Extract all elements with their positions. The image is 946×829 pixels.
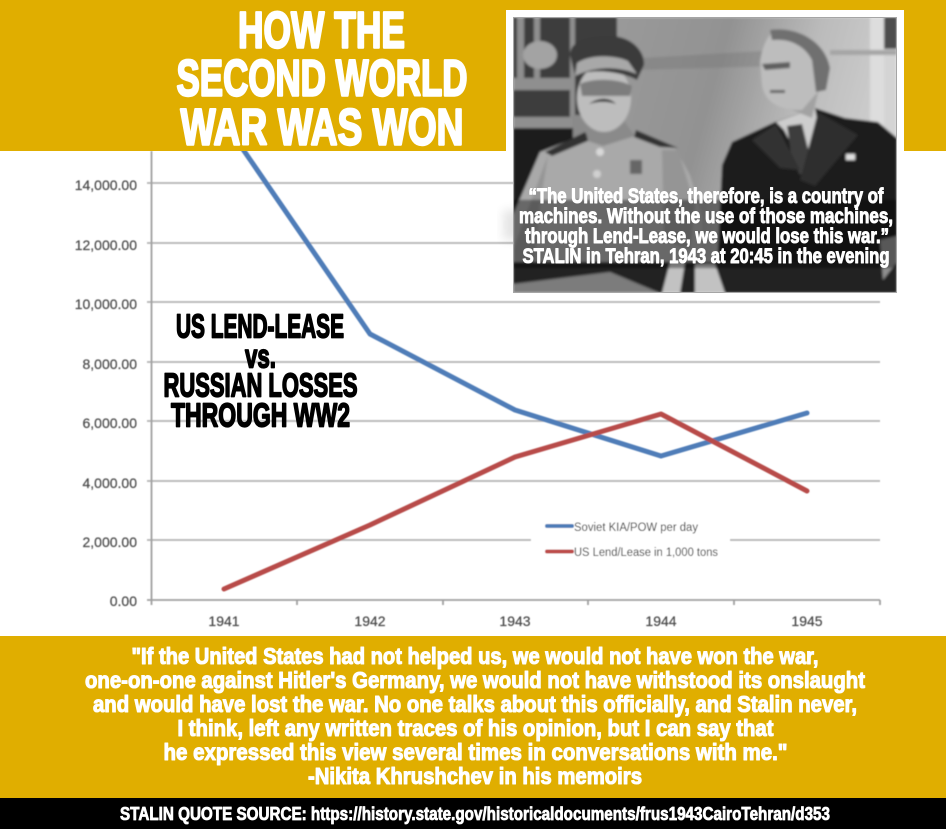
chart heading: THROUGH WW2 [171, 396, 350, 434]
top gold banner [0, 0, 946, 151]
Khrushchev quote: -Nikita Khrushchev in his memoirs [308, 763, 642, 789]
Khrushchev quote: and would have lost the war. No one talks about this officially, and Stalin never, [93, 691, 857, 717]
chart heading: US LEND-LEASE [176, 308, 344, 344]
source bar [0, 798, 946, 829]
chart: lend-lease vs Soviet losses line chart [75, 145, 880, 629]
y axis labels: 14,000.00 [75, 177, 137, 193]
x axis labels: 1941 [208, 613, 240, 629]
title: HOW THE [238, 2, 405, 58]
figure: Stalin [514, 36, 699, 262]
chart heading [164, 308, 358, 434]
y axis labels: 2,000.00 [82, 534, 137, 550]
y axis labels: 4,000.00 [82, 475, 137, 491]
bottom gold banner [0, 636, 946, 798]
source text: STALIN QUOTE SOURCE: https://history.state.gov/historicaldocuments/frus1943CairoTehran/d353 [120, 804, 830, 824]
photo: Stalin and Roosevelt at Tehran with quote [513, 17, 897, 293]
Khrushchev quote [85, 643, 865, 789]
legend: US Lend/Lease in 1,000 tons [574, 547, 718, 559]
chart heading: RUSSIAN LOSSES [164, 366, 358, 404]
wall backdrop [616, 18, 872, 264]
y axis labels: 6,000.00 [82, 415, 137, 431]
title: WAR WAS WON [180, 98, 464, 156]
photo frame [506, 10, 904, 293]
y axis labels: 8,000.00 [82, 356, 137, 372]
x axis labels: 1942 [354, 613, 386, 629]
x axis labels [208, 613, 823, 629]
x axis labels: 1943 [499, 613, 531, 629]
y axis labels: 12,000.00 [75, 237, 137, 253]
Stalin quote [519, 185, 893, 268]
legend [531, 512, 730, 568]
figure: Roosevelt [717, 28, 896, 264]
chairs and lower dark band [514, 261, 725, 292]
y axis labels: 0.00 [110, 593, 137, 609]
Khrushchev quote: I think, left any written traces of his opinion, but I can say that [178, 715, 774, 741]
Khrushchev quote: "If the United States had not helped us, we would not have won the war, [132, 643, 818, 669]
y axis labels: 10,000.00 [75, 296, 137, 312]
Khrushchev quote: he expressed this view several times in conversations with me." [164, 739, 788, 765]
photo shadow [503, 210, 523, 240]
line: Soviet KIA/POW per day [240, 145, 807, 456]
x axis labels: 1945 [791, 613, 823, 629]
chart heading: vs. [245, 338, 276, 374]
title: SECOND WORLD [176, 50, 468, 106]
title [176, 2, 468, 156]
line: US Lend/Lease [224, 414, 807, 589]
gridlines and axes [147, 151, 880, 605]
Khrushchev quote: one-on-one against Hitler's Germany, we would not have withstood its onslaught [85, 667, 865, 693]
x axis labels: 1944 [645, 613, 677, 629]
legend: Soviet KIA/POW per day [574, 522, 698, 534]
y axis labels [75, 177, 137, 609]
